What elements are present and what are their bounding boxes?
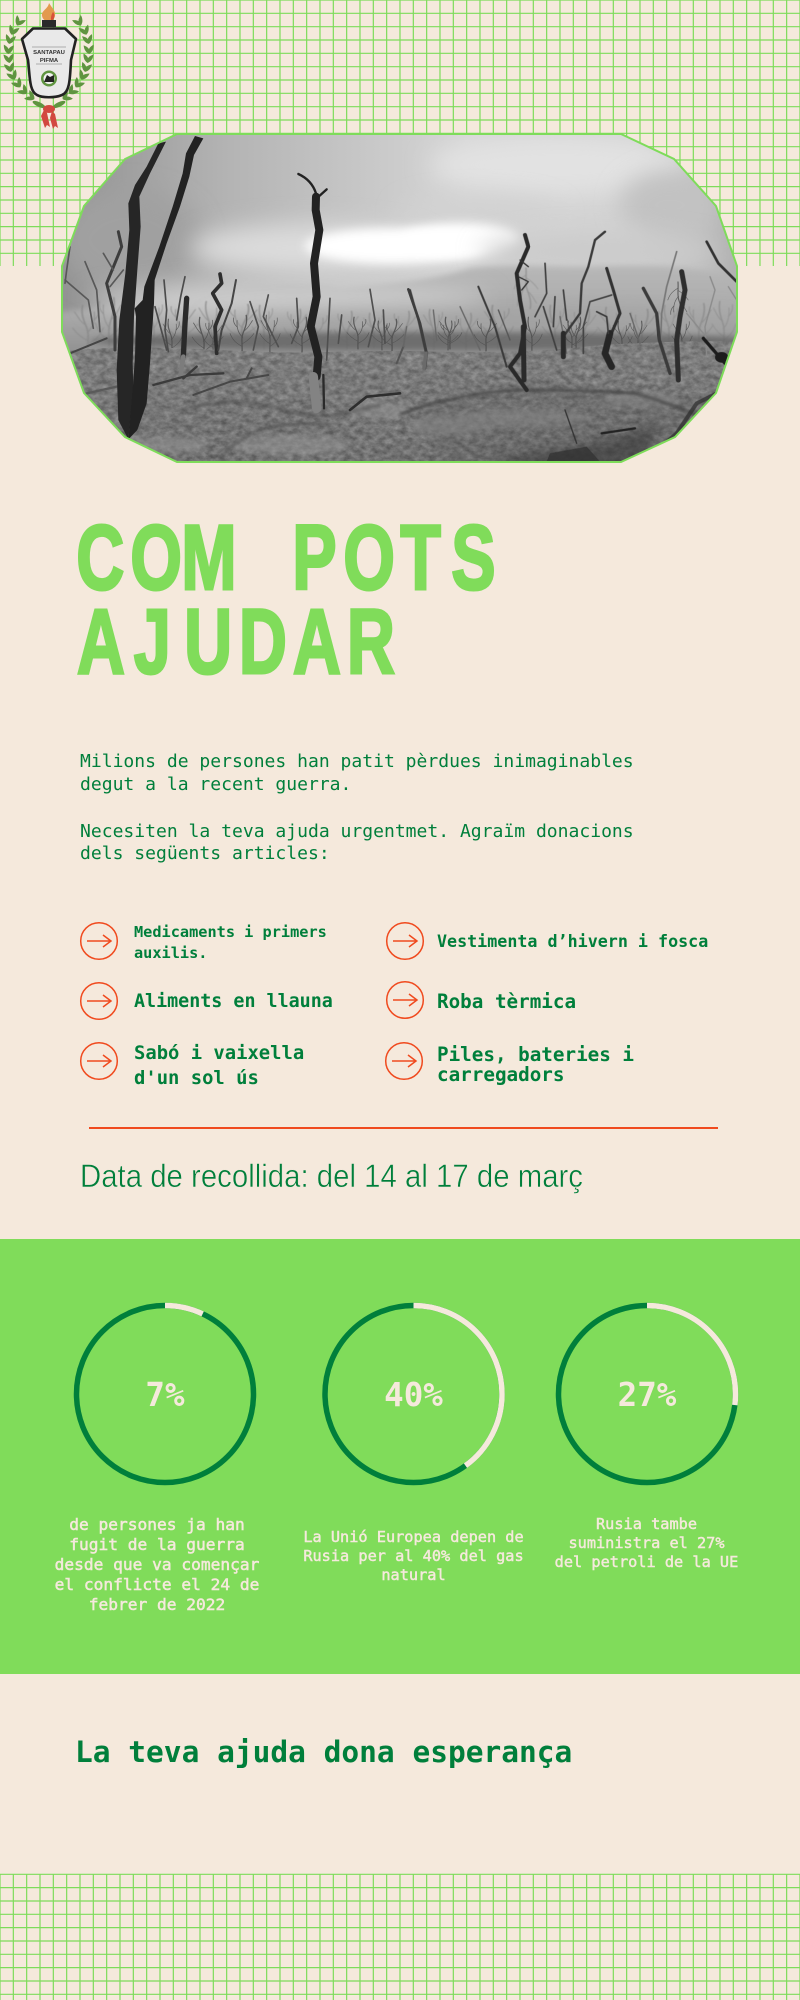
stat: 7%: [55, 1306, 260, 1614]
stat: 7%: el conflicte el 24 de: [55, 1575, 259, 1594]
item: canned food: [81, 983, 333, 1019]
icon: arrow in circle: [81, 923, 117, 959]
stat: 40%: 40%: [384, 1376, 443, 1414]
icon: shield: SANTAPAU: [33, 50, 65, 56]
stat: 27%: suministra el 27%: [568, 1534, 725, 1552]
icon: arrow in circle: [387, 923, 423, 959]
icon: torch flame: [42, 3, 56, 27]
title: [76, 505, 496, 693]
item: canned food: Aliments en llauna: [134, 991, 333, 1012]
item: soap and tableware: Sabó i vaixella: [134, 1043, 304, 1064]
stat: 7%: febrer de 2022: [89, 1595, 225, 1614]
icon: red ribbon: [41, 105, 58, 129]
item: medicines: [81, 923, 327, 962]
logo: Santapau PIFMA crest: [3, 3, 94, 129]
item: thermal clothes: [387, 982, 576, 1018]
stat: 27%: 27%: [618, 1376, 677, 1414]
stat: 27%: [555, 1306, 738, 1571]
icon: laurel wreath: [3, 15, 94, 110]
list of requested items: [81, 923, 708, 1089]
stat: 40%: Rusia per al 40% del gas: [303, 1547, 524, 1565]
ground: [70, 341, 731, 461]
closing heading: La teva ajuda dona esperança: [75, 1735, 572, 1769]
intro text: [80, 751, 634, 864]
intro text: degut a la recent guerra.: [80, 774, 351, 795]
item: batteries: [386, 1043, 634, 1086]
intro text: dels següents articles:: [80, 843, 330, 864]
item: medicines: auxilis.: [134, 944, 207, 962]
icon: arrow in circle: [387, 982, 423, 1018]
collection dates: Data de recollida: del 14 al 17 de març: [80, 1158, 583, 1194]
icon: shield: [22, 28, 76, 97]
item: batteries: carregadors: [437, 1063, 564, 1086]
icon: shield: PIFMA: [40, 58, 59, 64]
stat: 7%: fugit de la guerra: [69, 1535, 245, 1554]
icon: arrow in circle: [386, 1043, 422, 1079]
intro text: Milions de persones han patit pèrdues inimaginables: [80, 751, 634, 772]
background forest of small bare trees: [73, 268, 736, 352]
panel: statistics band: [0, 1239, 800, 1674]
stat: 40%: [303, 1306, 524, 1584]
item: winter clothing: [387, 923, 708, 959]
photo: burnt forest in octagonal frame: [60, 130, 770, 470]
item: batteries: Piles, bateries i: [437, 1043, 634, 1066]
stat: 27%: del petroli de la UE: [555, 1553, 738, 1571]
donut 7%: [76, 1306, 254, 1482]
donut 40%: [325, 1306, 502, 1482]
intro text: Necesiten la teva ajuda urgentmet. Agraïm donacions: [80, 821, 634, 842]
item: soap and tableware: d'un sol ús: [134, 1068, 259, 1089]
hills on the horizon: [60, 265, 740, 360]
stat: 27%: Rusia tambe: [596, 1515, 697, 1533]
title: COM POTS: [76, 505, 496, 609]
stat: 7%: de persones ja han: [69, 1515, 245, 1534]
item: winter clothing: Vestimenta d’hivern i fosca: [437, 931, 708, 951]
stat: 40%: natural: [381, 1566, 446, 1584]
item: thermal clothes: Roba tèrmica: [437, 990, 576, 1013]
two large foreground trunks: [117, 142, 166, 439]
right trees, traced in 3x crop coordinates: [403, 232, 737, 462]
icon: arrow in circle: [81, 1043, 117, 1079]
icon: arrow in circle: [81, 983, 117, 1019]
left trees, traced in 3x crop coordinates: [65, 136, 427, 439]
stat: 40%: La Unió Europea depen de: [303, 1528, 524, 1546]
title: AJUDAR: [77, 589, 395, 693]
stat: 7%: desde que va començar: [55, 1555, 260, 1574]
item: medicines: Medicaments i primers: [134, 923, 327, 941]
item: soap and tableware: [81, 1043, 304, 1089]
stat: 7%: 7%: [145, 1376, 185, 1414]
donut 27%: [558, 1306, 736, 1482]
